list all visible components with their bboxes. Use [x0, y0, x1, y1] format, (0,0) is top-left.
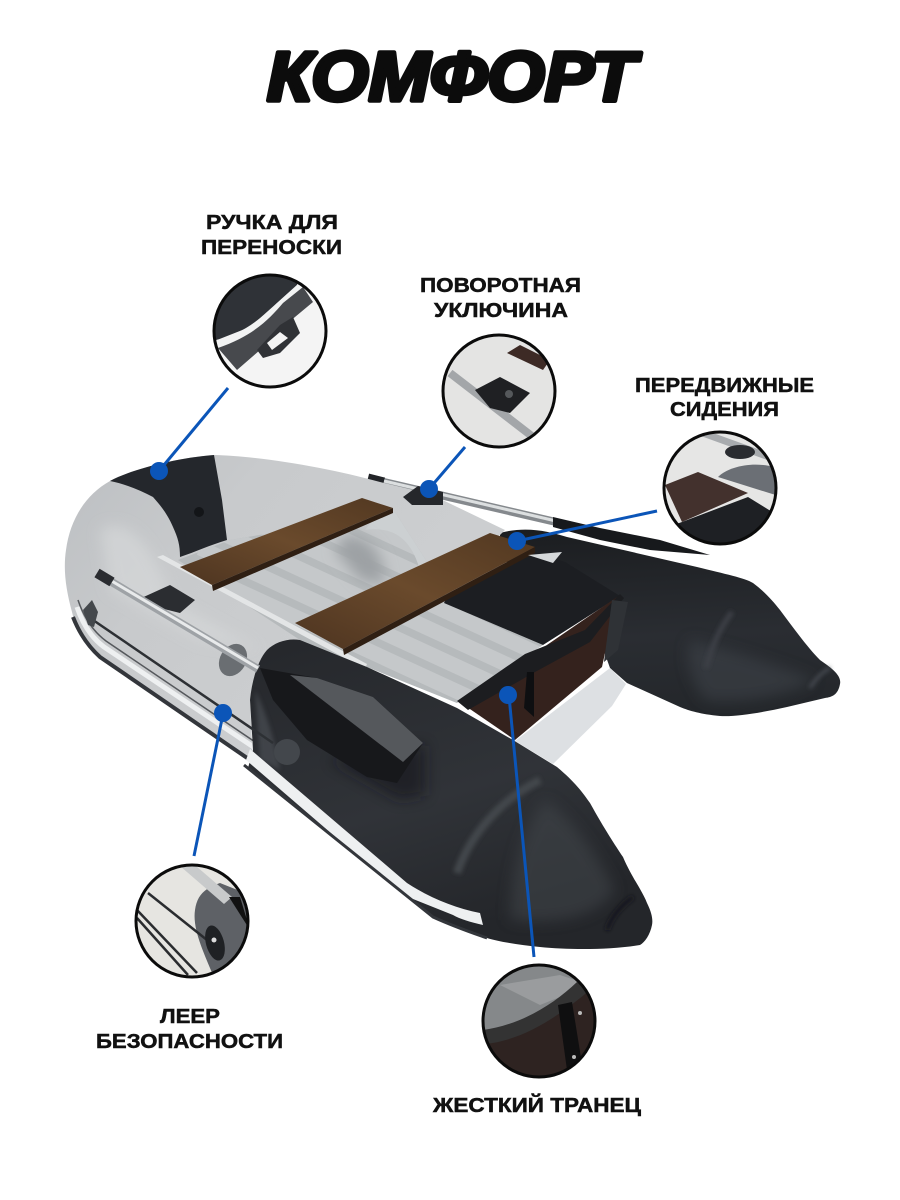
grey hull: [65, 455, 505, 762]
oar blade shadow: [330, 745, 425, 800]
far tube seam: [706, 612, 732, 668]
hull rub strip: [77, 607, 258, 750]
inner tube trim: [157, 555, 367, 669]
far tube tip seam: [810, 668, 830, 688]
far tube sheen: [688, 640, 815, 701]
oar ring: [213, 639, 253, 681]
oar: near side shaft: [97, 573, 258, 669]
rope mount: [83, 600, 98, 627]
seat rail right: [528, 552, 562, 563]
label: movable seats: СИДЕНИЯ: [670, 399, 779, 421]
inset: carry handle: [210, 270, 330, 390]
label: oarlock: [420, 275, 581, 322]
floor: [178, 528, 543, 703]
inflatable boat: [65, 448, 840, 949]
pointer lines and dots: [150, 388, 657, 957]
label: carry handle: РУЧКА ДЛЯ: [206, 212, 338, 234]
far oarlock: [403, 486, 443, 505]
inset: rigid transom: [480, 965, 600, 1080]
pointer: transom: [499, 686, 534, 957]
oar: far side: [368, 478, 710, 555]
lower dark trim: [244, 765, 487, 938]
thin trim line: [78, 600, 258, 744]
inner wall: far tube: [444, 552, 620, 645]
transom: [457, 594, 628, 740]
label: movable seats: ПЕРЕДВИЖНЫЕ: [635, 375, 814, 397]
label: carry handle: [201, 212, 342, 259]
seat 2: [295, 533, 535, 655]
oar blade sheen: [290, 675, 423, 762]
far tube: black stern section: [500, 530, 840, 716]
inner curve wall: [376, 512, 427, 566]
near tube tip seam: [607, 897, 633, 930]
label: rigid transom: ЖЕСТКИЙ ТРАНЕЦ: [432, 1093, 641, 1117]
oarlock on near side: [137, 585, 195, 613]
hull underside at stern: [515, 668, 626, 764]
label: safety rope: ЛЕЕР: [160, 1006, 220, 1028]
floor slats: [197, 523, 540, 700]
label: oarlock: УКЛЮЧИНА: [434, 300, 568, 322]
near tube patch sheen: [255, 690, 280, 770]
seat 1: [180, 498, 393, 591]
safety rope: [93, 620, 273, 743]
title: КОМФОРТ: [267, 38, 641, 116]
hull soft highlight: [100, 525, 260, 650]
handle valve: [274, 739, 300, 765]
white side stripe: [246, 749, 483, 925]
near tube tip sheen: [510, 800, 615, 921]
inset: oarlock: [440, 330, 560, 450]
label: safety rope: [96, 1006, 283, 1053]
pointer: safety rope: [194, 704, 232, 856]
bow valve: [194, 507, 204, 517]
inner shadow: [335, 535, 385, 585]
inset: safety rope: [135, 865, 255, 985]
pointer: oarlock: [420, 447, 465, 498]
pointer: seat: [508, 511, 657, 550]
pointer: carry handle: [150, 388, 228, 480]
near tube: black stern section: [248, 639, 652, 949]
near tube seam: [457, 780, 540, 873]
inset: movable seat: [660, 430, 782, 550]
keel line: [73, 617, 253, 762]
black bow patch: [110, 455, 227, 557]
label: carry handle: ПЕРЕНОСКИ: [201, 237, 342, 259]
label: oarlock: ПОВОРОТНАЯ: [420, 275, 581, 297]
oar blade: [260, 668, 423, 783]
label: movable seats: [635, 375, 814, 421]
label: safety rope: БЕЗОПАСНОСТИ: [96, 1031, 283, 1053]
